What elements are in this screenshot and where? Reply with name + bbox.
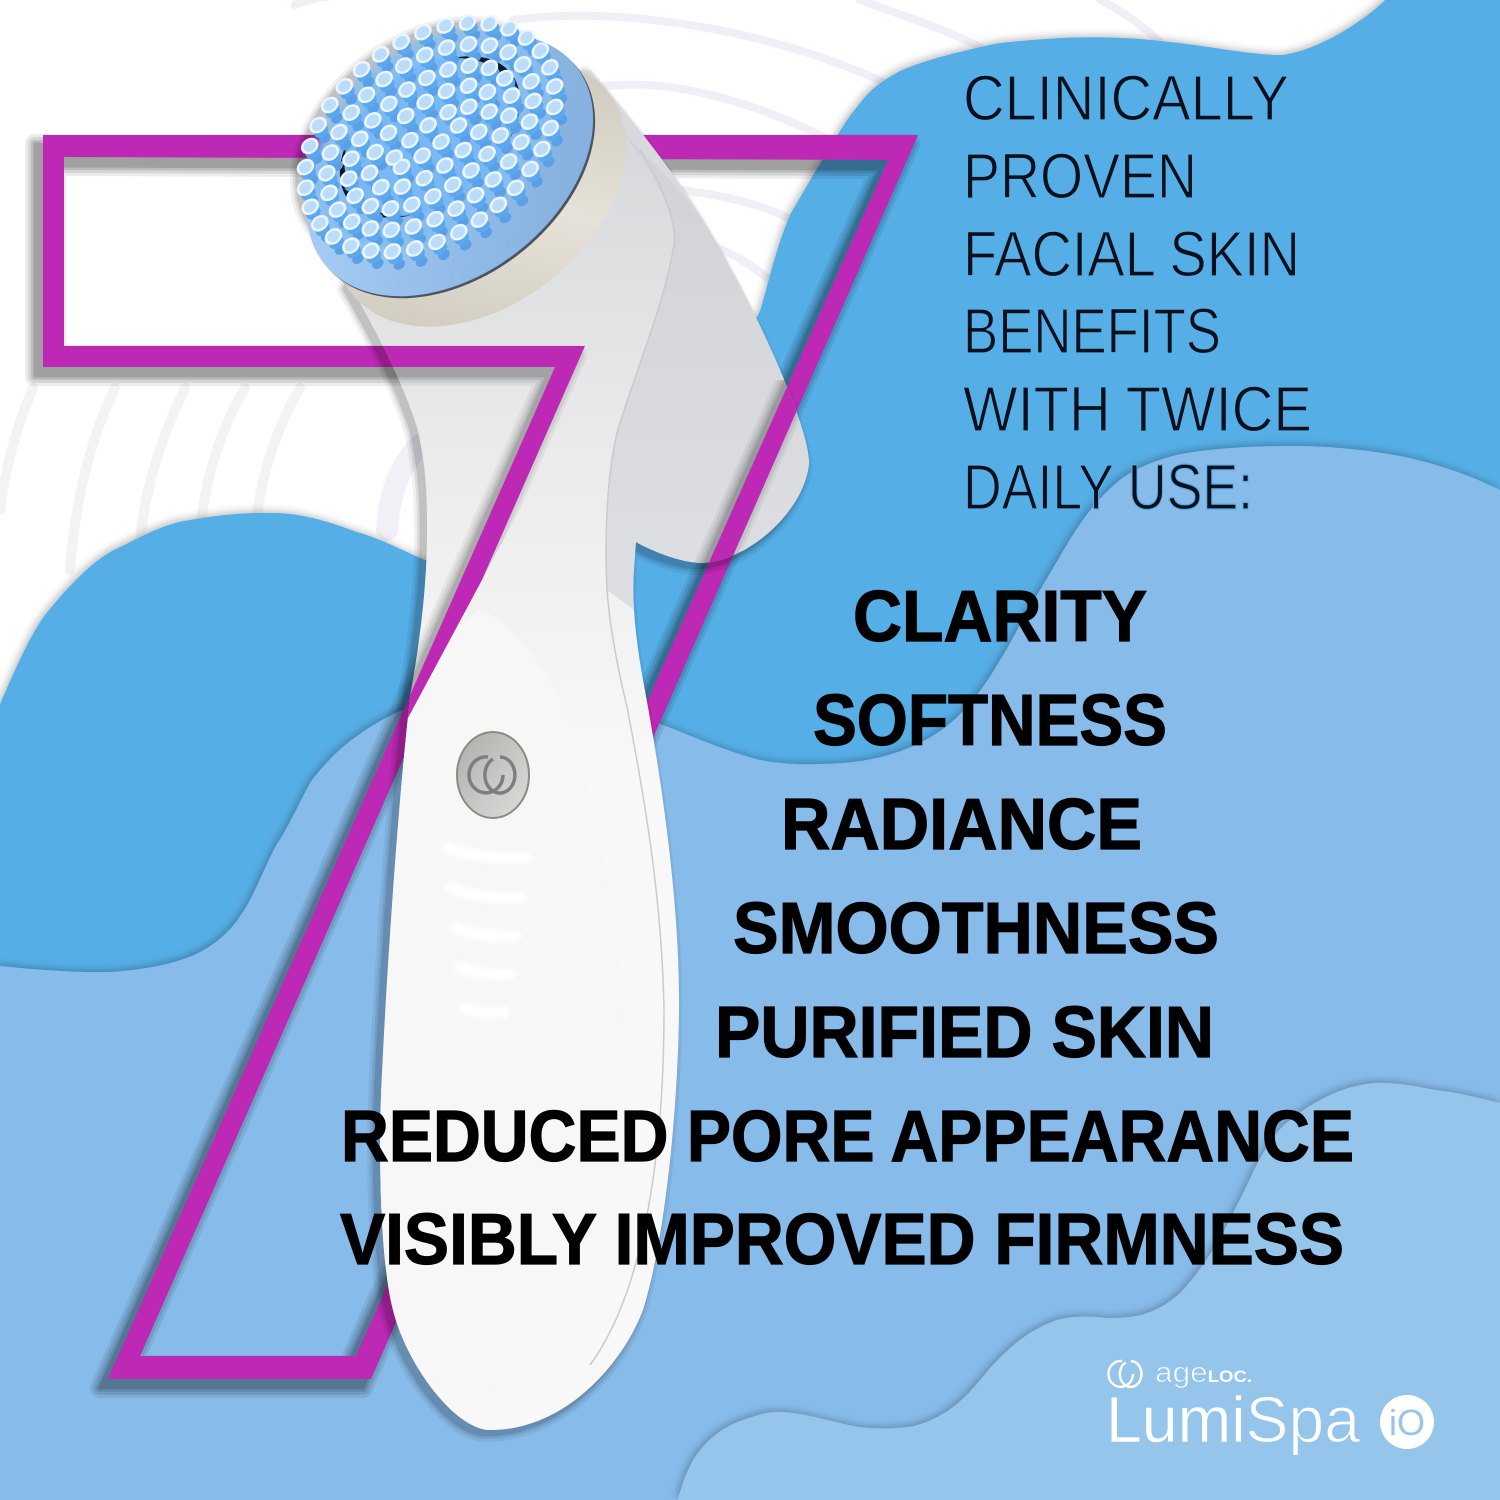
benefits list: SMOOTHNESS [733, 889, 1219, 969]
numeral outline [43, 135, 918, 1379]
indicator lights [448, 848, 526, 1013]
heading text: DAILY USE: [963, 451, 1253, 523]
front numeral outline [383, 346, 796, 718]
wave: medium blue [0, 446, 1500, 1500]
front numeral shadow [382, 345, 799, 718]
LumiSpa wordmark: LumiSpa [1106, 1383, 1361, 1456]
wave: light blue [678, 1083, 1500, 1500]
logo rings icon [1108, 1361, 1141, 1387]
numeral shadow [35, 144, 910, 1388]
heading text [963, 62, 1312, 523]
benefits list: RADIANCE [781, 785, 1142, 865]
benefits list: SOFTNESS [813, 681, 1167, 761]
heading text: PROVEN [963, 140, 1197, 212]
button logo [469, 757, 515, 793]
power button [457, 732, 529, 818]
heading text: BENEFITS [963, 295, 1221, 367]
bristle rims [261, 0, 599, 299]
brush disc [256, 0, 644, 350]
heading text: WITH TWICE [963, 373, 1312, 445]
collar [283, 4, 677, 382]
benefits list [340, 577, 1354, 1280]
rear bulge [606, 130, 809, 610]
brush rim line [258, 0, 646, 352]
bristle faces [261, 0, 599, 299]
bristle stems [264, 0, 602, 305]
side seam [590, 150, 674, 1365]
purple numeral 7 (front layer over device) [382, 345, 799, 718]
iO badge [1380, 1395, 1434, 1449]
bristle surface glow [269, 0, 595, 296]
purple numeral 7 (back layer) [35, 135, 918, 1388]
benefits list: REDUCED PORE APPEARANCE [341, 1097, 1354, 1177]
bristle dimples [268, 0, 606, 312]
iO badge text: iO [1389, 1402, 1425, 1443]
brush bristles [261, 0, 606, 312]
heading text: FACIAL SKIN [963, 218, 1300, 290]
brand logo [1106, 1357, 1434, 1456]
dark gap and centre pad [308, 21, 552, 253]
benefits list: CLARITY [853, 577, 1147, 657]
front panel [380, 610, 625, 1395]
heading text: CLINICALLY [963, 62, 1289, 134]
benefits list: VISIBLY IMPROVED FIRMNESS [340, 1200, 1344, 1280]
background arcs [0, 0, 1160, 570]
device: LumiSpa cleanser [253, 0, 809, 1434]
device shadow [253, 0, 804, 1434]
device body [350, 70, 809, 1430]
ageLOC wordmark: age LOC. [1155, 1357, 1252, 1389]
benefits list: PURIFIED SKIN [715, 993, 1214, 1073]
